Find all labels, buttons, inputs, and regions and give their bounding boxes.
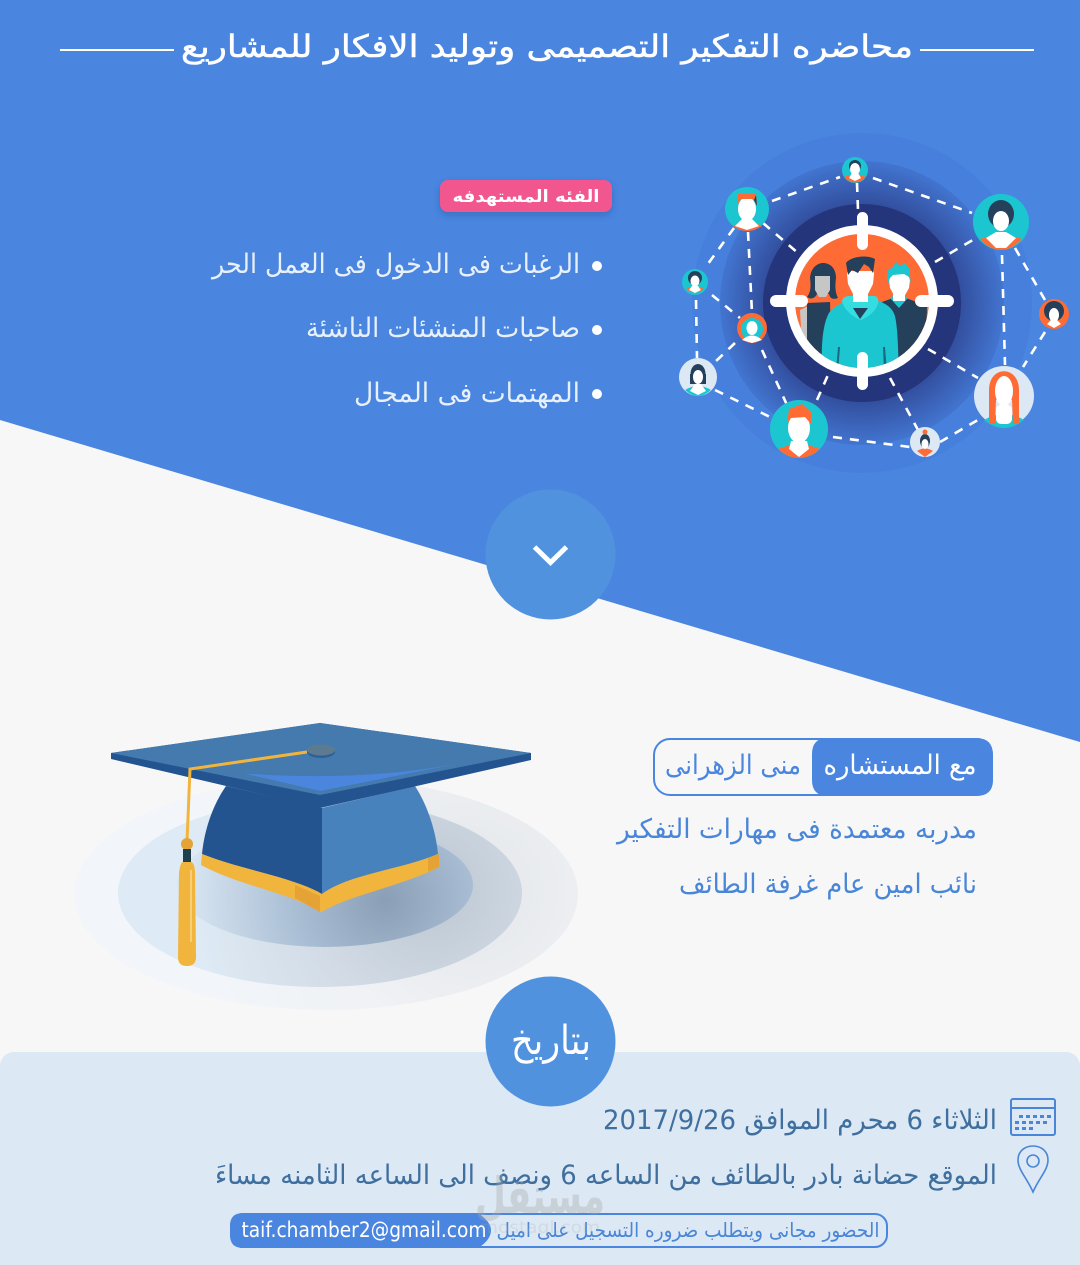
- presenter name pill: مع المستشاره: [824, 750, 976, 781]
- registration pill: taif.chamber2@gmail.com: [242, 1218, 486, 1242]
- graduation cap illustration: [74, 723, 578, 1010]
- registration pill: [230, 1213, 887, 1248]
- tassel: [178, 838, 196, 966]
- badge: target audience: الفئه المستهدفه: [452, 187, 600, 207]
- date heading circle: [486, 976, 616, 1106]
- presenter name pill: [654, 738, 993, 796]
- watermark: mostaql.com: [480, 1218, 600, 1238]
- icon: location pin: [1018, 1146, 1048, 1192]
- presenter description: مدربه معتمدة فى مهارات التفكير: [615, 814, 977, 845]
- cap shadow: [74, 778, 578, 1010]
- audience list: صاحبات المنشئات الناشئة: [306, 313, 580, 344]
- location text: الموقع حضانة بادر بالطائف من الساعه 6 ونصف الى الساعه الثامنه مساءَ: [215, 1160, 997, 1191]
- date heading circle: بتاريخ: [511, 1018, 591, 1064]
- title: محاضره التفكير التصميمى وتوليد الافكار للمشاريع: [181, 29, 913, 65]
- audience list: المهتمات فى المجال: [354, 378, 580, 409]
- icon: calendar: [1011, 1099, 1055, 1135]
- presenter description: [615, 814, 977, 900]
- badge: target audience: [440, 180, 612, 212]
- blue diagonal background: [0, 0, 1080, 742]
- details panel: [0, 1052, 1080, 1265]
- audience list: [210, 249, 602, 409]
- presenter description: نائب امين عام غرفة الطائف: [679, 869, 977, 900]
- target with people: [790, 230, 934, 372]
- chevron circle: [486, 490, 616, 620]
- presenter name pill: منى الزهرانى: [665, 750, 801, 781]
- watermark: مستقل: [475, 1167, 605, 1225]
- crosshair: [770, 212, 954, 390]
- date text: الثلاثاء 6 محرم الموافق 2017/9/26: [603, 1105, 997, 1136]
- watermark: [475, 1167, 605, 1238]
- network illustration: [679, 157, 1069, 458]
- avatar nodes: [679, 157, 1069, 458]
- audience list: الرغبات فى الدخول فى العمل الحر: [210, 249, 580, 280]
- registration pill: الحضور مجانى ويتطلب ضروره التسجيل على اميل: [496, 1218, 880, 1242]
